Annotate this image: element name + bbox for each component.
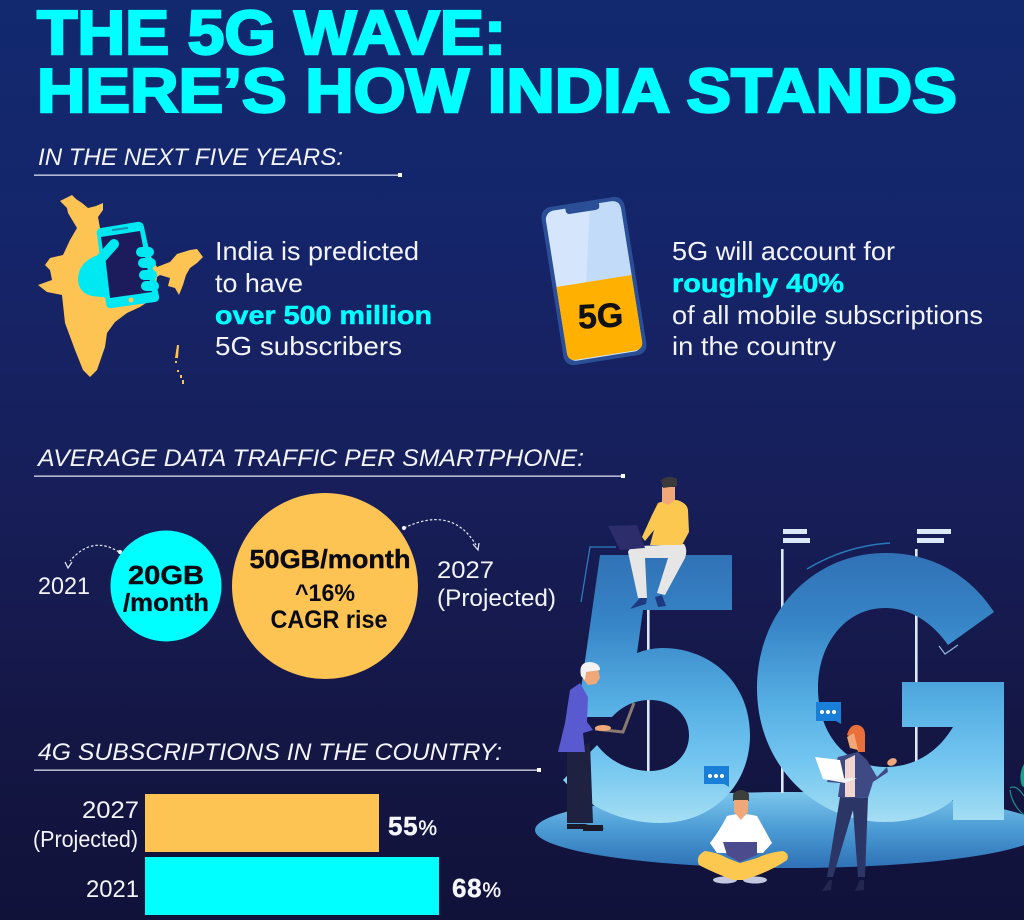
icon: phone with 5G fill [540, 195, 648, 367]
text: 40 percent of subscriptions: of all mobile subscriptions [672, 300, 983, 330]
label: 2027 projected: 2027 [437, 557, 494, 584]
title: HERE’S HOW INDIA STANDS [37, 57, 957, 126]
person: standing with laptop [558, 662, 634, 831]
title: THE 5G WAVE: [37, 0, 506, 68]
text: 500 million subscribers: over 500 million [215, 300, 432, 330]
plant at right edge [1010, 764, 1024, 815]
text: 40 percent of subscriptions [672, 236, 983, 361]
circle: 50GB per month: CAGR rise [270, 606, 388, 634]
bar: 2021: 68% [452, 873, 502, 903]
heading: average data traffic: AVERAGE DATA TRAFFIC PER SMARTPHONE: [36, 445, 584, 472]
circle: 20GB per month [110, 530, 222, 642]
icon: phone in hand [78, 222, 159, 308]
label: 2021: 2021 [38, 573, 90, 600]
bar: 2027: (Projected) [33, 826, 138, 852]
circle: 20GB per month: /month [123, 589, 209, 617]
bar: 2021: 2021 [86, 876, 139, 903]
platform disc [535, 792, 1024, 868]
text: 40 percent of subscriptions: 5G will account for [672, 236, 895, 266]
text: 40 percent of subscriptions: roughly 40% [672, 268, 844, 298]
speech bubble [816, 702, 841, 724]
thin accent lines [581, 543, 958, 654]
text: 500 million subscribers: to have [215, 268, 303, 298]
circle: 50GB per month: 50GB/month [250, 544, 410, 574]
heading: in the next five years: IN THE NEXT FIVE YEARS: [38, 144, 343, 171]
circle: 20GB per month: 20GB [128, 560, 204, 590]
circle: 50GB per month [232, 493, 418, 679]
icon: islands [175, 345, 184, 384]
icon: India map with hand holding phone [38, 195, 203, 384]
text: 500 million subscribers: India is predicted [215, 236, 419, 266]
text: 500 million subscribers: 5G subscribers [215, 331, 402, 361]
letter 5 [563, 555, 750, 823]
letter G [757, 553, 1004, 822]
person: cross-legged [698, 790, 788, 884]
label: 2027 projected: (Projected) [437, 585, 556, 612]
text: 500 million subscribers [215, 236, 432, 361]
bar: 2027 [33, 794, 438, 852]
arrow: to 2021 [65, 545, 122, 568]
heading: 4G subscriptions: 4G SUBSCRIPTIONS IN THE COUNTRY: [38, 739, 502, 766]
bar: 2021 [86, 857, 502, 915]
bar chart: 4G subscriptions [33, 794, 502, 915]
title [37, 0, 957, 126]
illustration: 5G with people [535, 477, 1024, 891]
bar: 2027: 2027 [82, 797, 139, 824]
text: 40 percent of subscriptions: in the country [672, 331, 836, 361]
icon: phone with 5G fill: 5G [577, 296, 624, 337]
label: 2027 projected [437, 557, 556, 612]
person: woman with laptop [815, 725, 898, 891]
bar: 2027: 55% [388, 811, 438, 841]
circle: 50GB per month: ^16% [295, 580, 355, 607]
heading: in the next five years [34, 144, 402, 177]
poles and flags [647, 529, 951, 793]
arrow: to 2027 [402, 520, 479, 550]
person: seated on 5 [608, 477, 689, 609]
speech bubble [704, 766, 729, 787]
